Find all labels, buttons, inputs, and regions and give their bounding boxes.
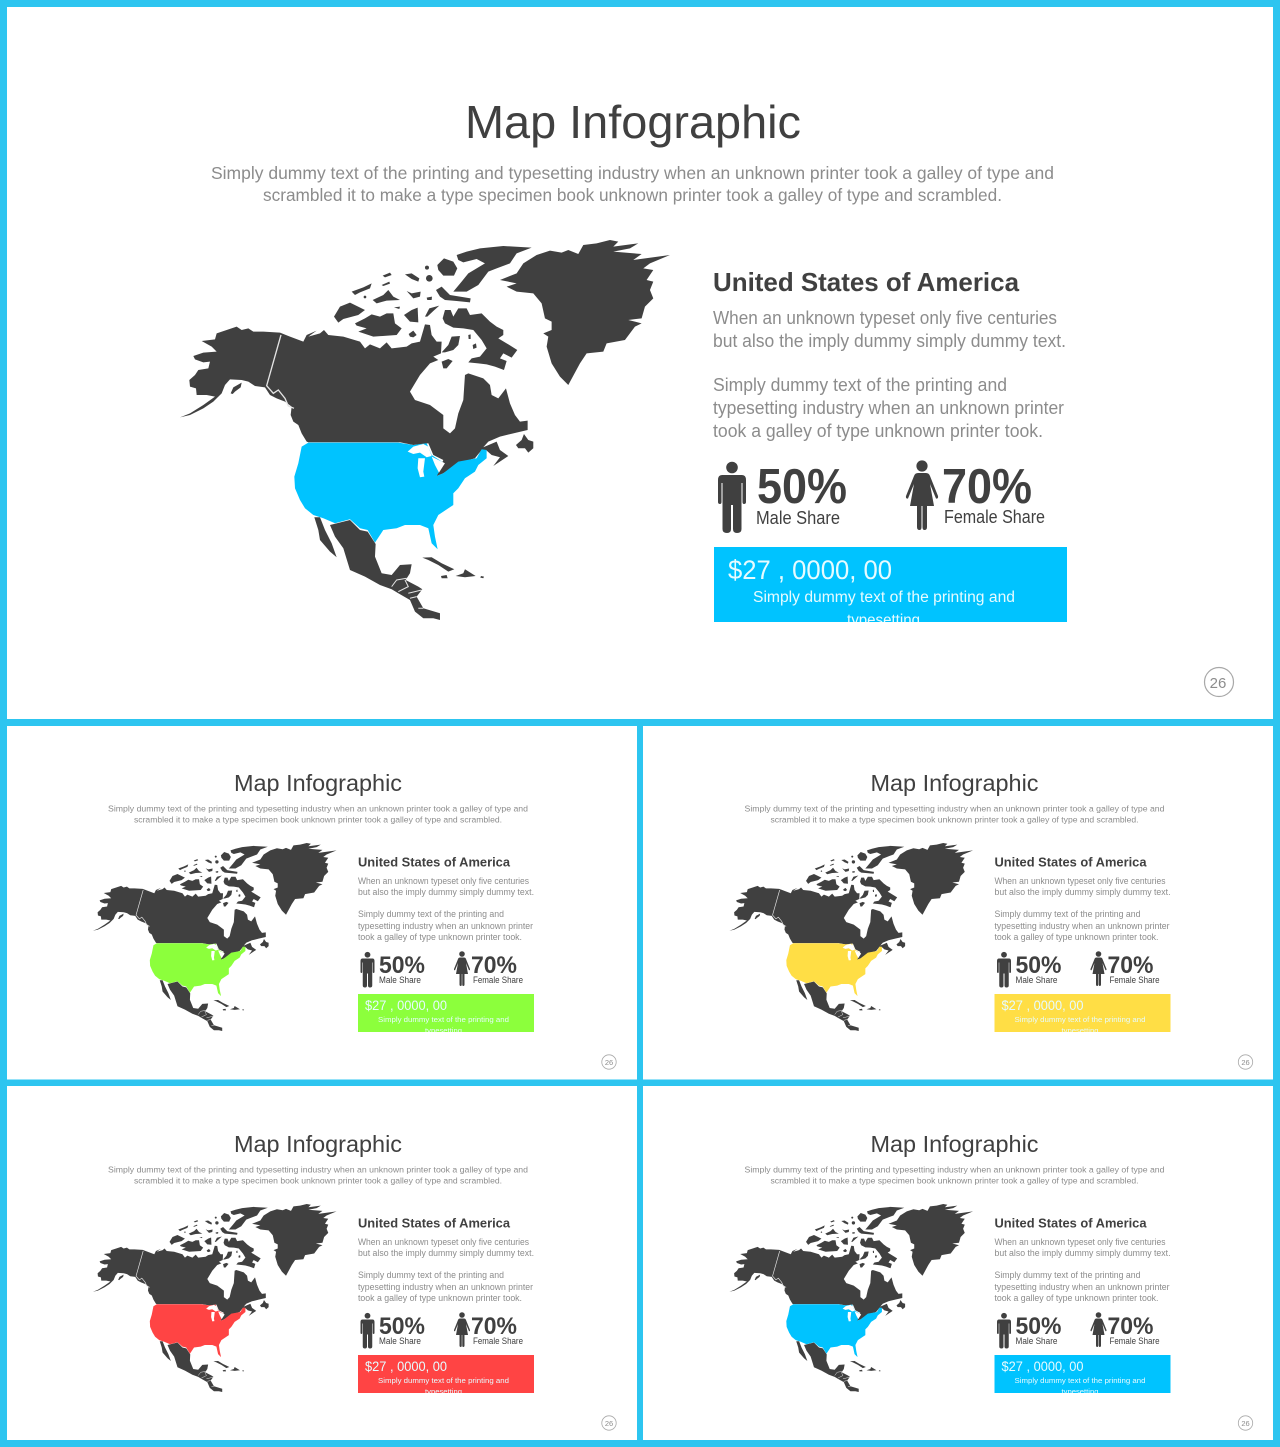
description text: typesetting industry when an unknown printer <box>994 921 1170 931</box>
stat: female share: 70% <box>471 952 517 979</box>
title: Map Infographic <box>234 1131 402 1157</box>
description text: but also the imply dummy simply dummy text. <box>994 1248 1170 1258</box>
icon: male <box>360 1313 374 1348</box>
stat: male share: Male Share <box>379 1336 421 1346</box>
stat: female share: 70% <box>1108 1313 1154 1340</box>
page number: 26 <box>605 1419 613 1428</box>
stat: male share: Male Share <box>379 975 421 985</box>
panel: red slide <box>7 1086 637 1440</box>
page number <box>1204 668 1234 696</box>
subtitle <box>108 1164 528 1186</box>
panel: blue slide <box>643 1086 1273 1440</box>
description text: When an unknown typeset only five centuries <box>994 1237 1166 1247</box>
callout box: $27 , 0000, 00 <box>728 555 892 585</box>
panel: yellow slide <box>643 726 1273 1080</box>
icon: male <box>360 952 374 988</box>
description text: but also the imply dummy simply dummy text. <box>358 887 534 897</box>
description text: took a galley of type unknown printer took. <box>994 932 1158 942</box>
country heading: United States of America <box>994 854 1147 870</box>
icon: female <box>1090 1312 1107 1347</box>
description text: but also the imply dummy simply dummy text. <box>713 331 1066 351</box>
description text: took a galley of type unknown printer took. <box>713 421 1043 441</box>
subtitle: scrambled it to make a type specimen book unknown printer took a galley of type and scrambled. <box>263 185 1002 205</box>
description text: but also the imply dummy simply dummy text. <box>994 887 1170 897</box>
description text <box>358 876 534 942</box>
callout box: Simply dummy text of the printing and <box>378 1015 509 1024</box>
description text: When an unknown typeset only five centuries <box>358 1237 529 1247</box>
callout box: typesetting <box>425 1387 462 1396</box>
icon: female <box>1090 951 1107 986</box>
callout box: typesetting <box>1062 1026 1098 1035</box>
page number <box>602 1055 616 1069</box>
page number: 26 <box>605 1058 613 1067</box>
title: Map Infographic <box>870 770 1038 796</box>
icon: male <box>997 952 1011 988</box>
map: USA highlighted blue <box>729 1204 973 1392</box>
description text: Simply dummy text of the printing and <box>358 909 504 919</box>
page number: 26 <box>1210 675 1226 692</box>
country heading: United States of America <box>994 1216 1147 1230</box>
panel: main slide <box>7 7 1273 719</box>
description text: took a galley of type unknown printer took. <box>358 932 522 942</box>
map: North America, USA highlighted blue <box>180 240 670 620</box>
stat: female share: Female Share <box>473 1336 523 1346</box>
stat: male share: 50% <box>1016 952 1062 979</box>
stat: female share: Female Share <box>473 975 523 985</box>
subtitle <box>744 1164 1165 1186</box>
icon: female <box>906 460 938 530</box>
page number <box>602 1416 616 1430</box>
description text: When an unknown typeset only five centuries <box>358 876 529 886</box>
stat: male share: 50% <box>379 1313 425 1340</box>
stat: male share: Male Share <box>1016 1336 1058 1346</box>
description text: but also the imply dummy simply dummy text. <box>358 1248 534 1258</box>
page number <box>1238 1416 1253 1430</box>
description text: When an unknown typeset only five centuries <box>994 876 1166 886</box>
callout box: Simply dummy text of the printing and <box>753 589 1015 606</box>
page number: 26 <box>1241 1058 1250 1067</box>
description text: Simply dummy text of the printing and <box>994 1270 1140 1280</box>
stat: female share: Female Share <box>1110 1336 1160 1346</box>
icon: male <box>718 462 746 533</box>
stat: female share: Female Share <box>1110 975 1160 985</box>
callout box: $27 , 0000, 00 <box>365 998 447 1013</box>
stat: female share: 70% <box>471 1313 517 1340</box>
subtitle: Simply dummy text of the printing and typesetting industry when an unknown printer took a galley of type and <box>211 163 1054 183</box>
stat: female share: 70% <box>942 460 1032 514</box>
map: USA highlighted red <box>93 1204 337 1392</box>
callout box: Simply dummy text of the printing and <box>1014 1376 1146 1385</box>
title: Map Infographic <box>870 1131 1038 1157</box>
subtitle <box>108 804 528 824</box>
callout box: typesetting <box>847 612 920 629</box>
stat: male share: Male Share <box>1016 975 1058 985</box>
description text: took a galley of type unknown printer took. <box>994 1293 1158 1303</box>
description text: Simply dummy text of the printing and <box>994 909 1140 919</box>
description text: Simply dummy text of the printing and <box>713 375 1007 395</box>
country heading: United States of America <box>358 1216 511 1230</box>
callout box: Simply dummy text of the printing and <box>1014 1015 1146 1024</box>
callout box: typesetting <box>425 1026 462 1035</box>
description text: typesetting industry when an unknown printer <box>358 1282 533 1292</box>
page number: 26 <box>1241 1419 1250 1428</box>
subtitle: scrambled it to make a type specimen book unknown printer took a galley of type and scrambled. <box>770 814 1138 824</box>
callout box: $27 , 0000, 00 <box>365 1359 447 1374</box>
icon: male <box>997 1313 1011 1348</box>
icon: female <box>454 951 470 986</box>
description text <box>713 308 1066 441</box>
description text: typesetting industry when an unknown printer <box>713 398 1064 418</box>
page number <box>1238 1055 1253 1069</box>
callout box: typesetting <box>1062 1387 1098 1396</box>
subtitle: Simply dummy text of the printing and typesetting industry when an unknown printer took a galley of type and <box>744 1164 1165 1174</box>
stat: female share: Female Share <box>944 507 1045 527</box>
title: Map Infographic <box>234 770 402 796</box>
country heading: United States of America <box>713 267 1020 297</box>
country heading: United States of America <box>358 854 511 870</box>
subtitle: Simply dummy text of the printing and typesetting industry when an unknown printer took a galley of type and <box>744 804 1165 814</box>
callout box <box>994 1355 1170 1396</box>
subtitle: Simply dummy text of the printing and typesetting industry when an unknown printer took a galley of type and <box>108 1164 528 1174</box>
map: USA highlighted green <box>93 843 337 1031</box>
callout box: $27 , 0000, 00 <box>1002 998 1084 1013</box>
panel: green slide <box>7 726 637 1080</box>
callout box: $27 , 0000, 00 <box>1002 1359 1084 1374</box>
stat: male share: 50% <box>757 460 847 514</box>
description text: When an unknown typeset only five centuries <box>713 308 1057 328</box>
callout box <box>714 547 1067 629</box>
subtitle <box>211 163 1054 205</box>
callout box <box>358 1355 534 1396</box>
stat: male share: 50% <box>1016 1313 1062 1340</box>
subtitle: scrambled it to make a type specimen book unknown printer took a galley of type and scrambled. <box>134 814 502 824</box>
description text: typesetting industry when an unknown printer <box>358 921 533 931</box>
description text <box>994 876 1170 942</box>
subtitle: scrambled it to make a type specimen book unknown printer took a galley of type and scrambled. <box>770 1176 1138 1186</box>
stat: male share: Male Share <box>756 508 840 528</box>
subtitle: scrambled it to make a type specimen book unknown printer took a galley of type and scrambled. <box>134 1176 502 1186</box>
description text <box>358 1237 534 1303</box>
icon: female <box>454 1312 470 1347</box>
callout box <box>358 994 534 1035</box>
description text: typesetting industry when an unknown printer <box>994 1282 1170 1292</box>
title: Map Infographic <box>465 96 801 148</box>
callout box: Simply dummy text of the printing and <box>378 1376 509 1385</box>
subtitle <box>744 804 1165 824</box>
map: USA highlighted yellow <box>729 843 973 1031</box>
description text: took a galley of type unknown printer took. <box>358 1293 522 1303</box>
description text <box>994 1237 1170 1303</box>
stat: male share: 50% <box>379 952 425 979</box>
subtitle: Simply dummy text of the printing and typesetting industry when an unknown printer took a galley of type and <box>108 804 528 814</box>
stat: female share: 70% <box>1108 952 1154 979</box>
description text: Simply dummy text of the printing and <box>358 1270 504 1280</box>
callout box <box>994 994 1170 1035</box>
